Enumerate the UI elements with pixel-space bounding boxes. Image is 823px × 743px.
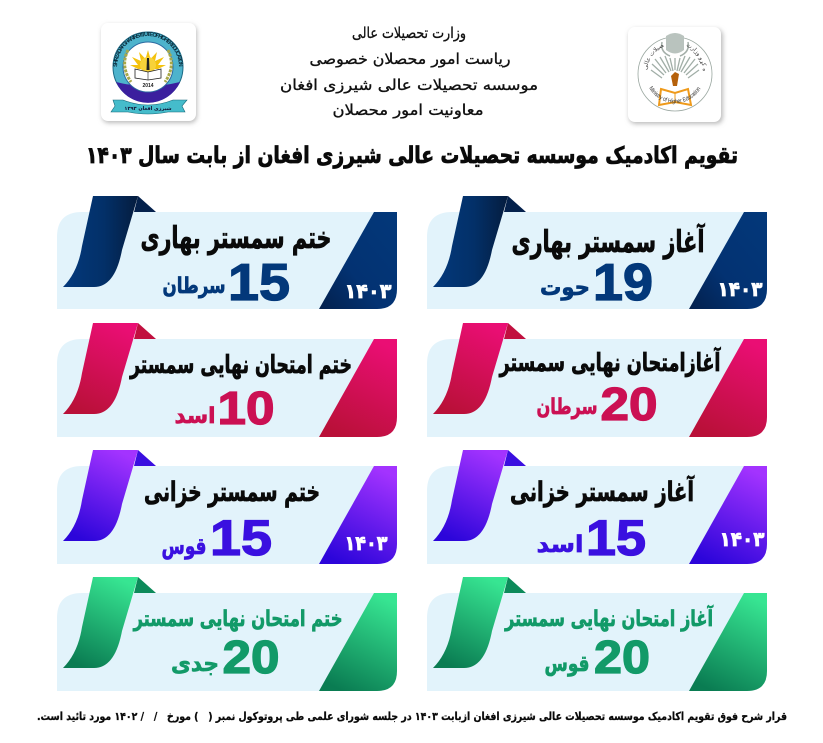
header lines [280,24,538,119]
logo: Shirzad Afghan Institute: شیرزی افغان ۱۳۹۳ [124,106,172,112]
card: spring end [57,196,397,312]
card: final exams autumn start [427,577,767,691]
card: final exams autumn start: 20 [594,631,650,683]
logo: Ministry of Higher Education [626,26,726,126]
card: spring end: ۱۴۰۳ [344,279,392,303]
card: spring end: 15 [228,254,290,312]
card: autumn start: ۱۴۰۳ [720,527,764,551]
card: autumn end: ختم سمستر خزانی [144,477,320,508]
card: final exams spring end: 10 [218,382,274,434]
card: autumn end: ۱۴۰۳ [344,531,388,555]
card: autumn start: 15 [586,510,646,566]
card: final exams autumn end: ختم امتحان نهایی سمستر [133,607,342,632]
logo: Shirzad Afghan Institute [100,22,200,126]
header lines: وزارت تحصیلات عالی [352,24,466,42]
card: final exams spring start: 20 [600,378,658,430]
card: autumn start: اسد [536,532,584,558]
card: final exams spring start: آغازامتحان نهایی سمستر [498,347,722,378]
card: spring start [427,196,767,312]
card: final exams autumn end: جدی [171,652,219,677]
card: final exams autumn start: آغاز امتحان نهایی سمستر [504,604,713,632]
card: final exams spring end [57,323,397,437]
card: spring end: ختم سمستر بهاری [140,221,332,256]
card: final exams spring end: ختم امتحان نهایی سمستر [129,350,352,380]
card: autumn end: قوس [162,534,206,560]
logo: Ministry of Higher Education: Ministry of Higher Education [649,86,700,104]
header lines: موسسه تحصیلات عالی شیرزی افغان [280,76,538,94]
card: final exams spring end: اسد [174,404,216,429]
header lines: معاونیت امور محصلان [332,101,484,119]
card: autumn start [427,450,767,566]
card: spring start: آغاز سمستر بهاری [512,223,705,260]
logo: Shirzad Afghan Institute: SHIRZAD AFGHAN INSTITUTE OF HIGHER EDUCATION [113,32,183,67]
card: final exams autumn end: 20 [222,631,280,683]
card: spring start: ۱۴۰۳ [718,277,762,301]
logo: Shirzad Afghan Institute: 2014 [142,83,154,89]
card: autumn end: 15 [210,510,272,566]
card: spring start: حوت [540,275,590,301]
card: final exams spring start [427,323,767,437]
header lines: ریاست امور محصلان خصوصی [310,50,510,68]
card: autumn end [57,450,397,566]
card: autumn start: آغاز سمستر خزانی [510,475,695,508]
card: spring end: سرطان [162,274,226,299]
card: final exams autumn start: قوس [544,652,590,677]
card: final exams spring start: سرطان [536,395,598,420]
card: final exams autumn end [57,577,397,691]
card: spring start: 19 [593,254,653,312]
